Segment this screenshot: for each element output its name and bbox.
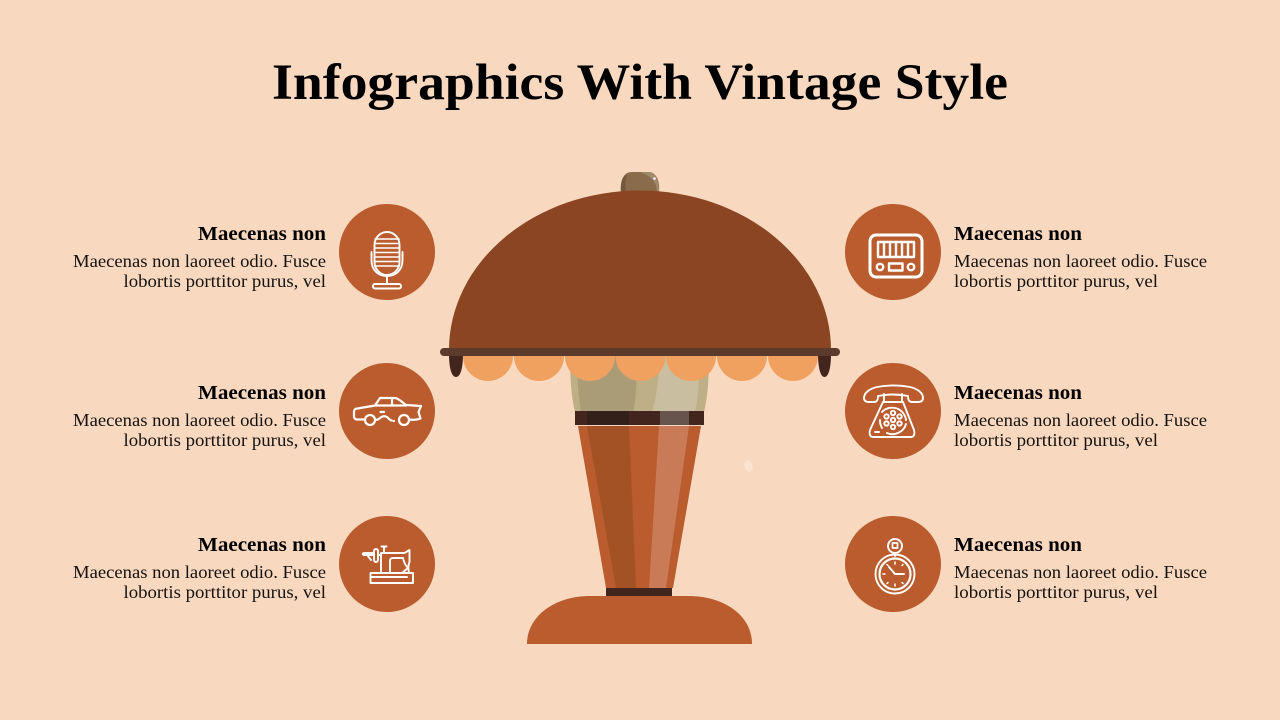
heading: Maecenas non [198, 534, 326, 556]
title: Infographics With Vintage Style [272, 55, 1008, 111]
lamp shade rim [440, 348, 840, 356]
icon: radio [845, 204, 941, 300]
item: middle left [73, 363, 435, 459]
body text [954, 410, 1207, 450]
lamp shade fringe scallops [463, 352, 818, 381]
item: middle right [845, 363, 1207, 459]
item: bottom right [845, 516, 1207, 612]
body text [73, 410, 326, 450]
body text: lobortis porttitor purus, vel [124, 271, 326, 291]
lamp stem [578, 426, 701, 588]
body text: Maecenas non laoreet odio. Fusce [954, 251, 1207, 271]
heading: Maecenas non [198, 382, 326, 404]
body text: lobortis porttitor purus, vel [124, 430, 326, 450]
heading: Maecenas non [198, 223, 326, 245]
body text [73, 251, 326, 291]
item: top right [845, 204, 1207, 300]
body text [73, 562, 326, 602]
small highlight speck [743, 459, 754, 473]
heading: Maecenas non [954, 534, 1082, 556]
body text [954, 562, 1207, 602]
lamp bulb [570, 352, 709, 412]
lamp shade tassels [449, 354, 831, 377]
lamp shade dome [449, 190, 831, 350]
icon: vintage car [339, 363, 435, 459]
icon: sewing machine [339, 516, 435, 612]
body text: lobortis porttitor purus, vel [954, 430, 1158, 450]
icon: microphone [339, 204, 435, 300]
lamp finial [621, 172, 659, 192]
body text: lobortis porttitor purus, vel [954, 271, 1158, 291]
icon: rotary telephone [845, 363, 941, 459]
body text: Maecenas non laoreet odio. Fusce [73, 410, 326, 430]
lamp neck collar [575, 411, 704, 426]
body text: Maecenas non laoreet odio. Fusce [954, 562, 1207, 582]
icon: pocket watch [845, 516, 941, 612]
lamp illustration [440, 172, 840, 644]
body text: Maecenas non laoreet odio. Fusce [73, 562, 326, 582]
item: bottom left [73, 516, 435, 612]
body text: Maecenas non laoreet odio. Fusce [954, 410, 1207, 430]
item: top left [73, 204, 435, 300]
body text: Maecenas non laoreet odio. Fusce [73, 251, 326, 271]
heading: Maecenas non [954, 223, 1082, 245]
heading: Maecenas non [954, 382, 1082, 404]
body text: lobortis porttitor purus, vel [124, 582, 326, 602]
body text [954, 251, 1207, 291]
body text: lobortis porttitor purus, vel [954, 582, 1158, 602]
lamp base [527, 596, 752, 644]
lamp lower collar [606, 588, 672, 596]
